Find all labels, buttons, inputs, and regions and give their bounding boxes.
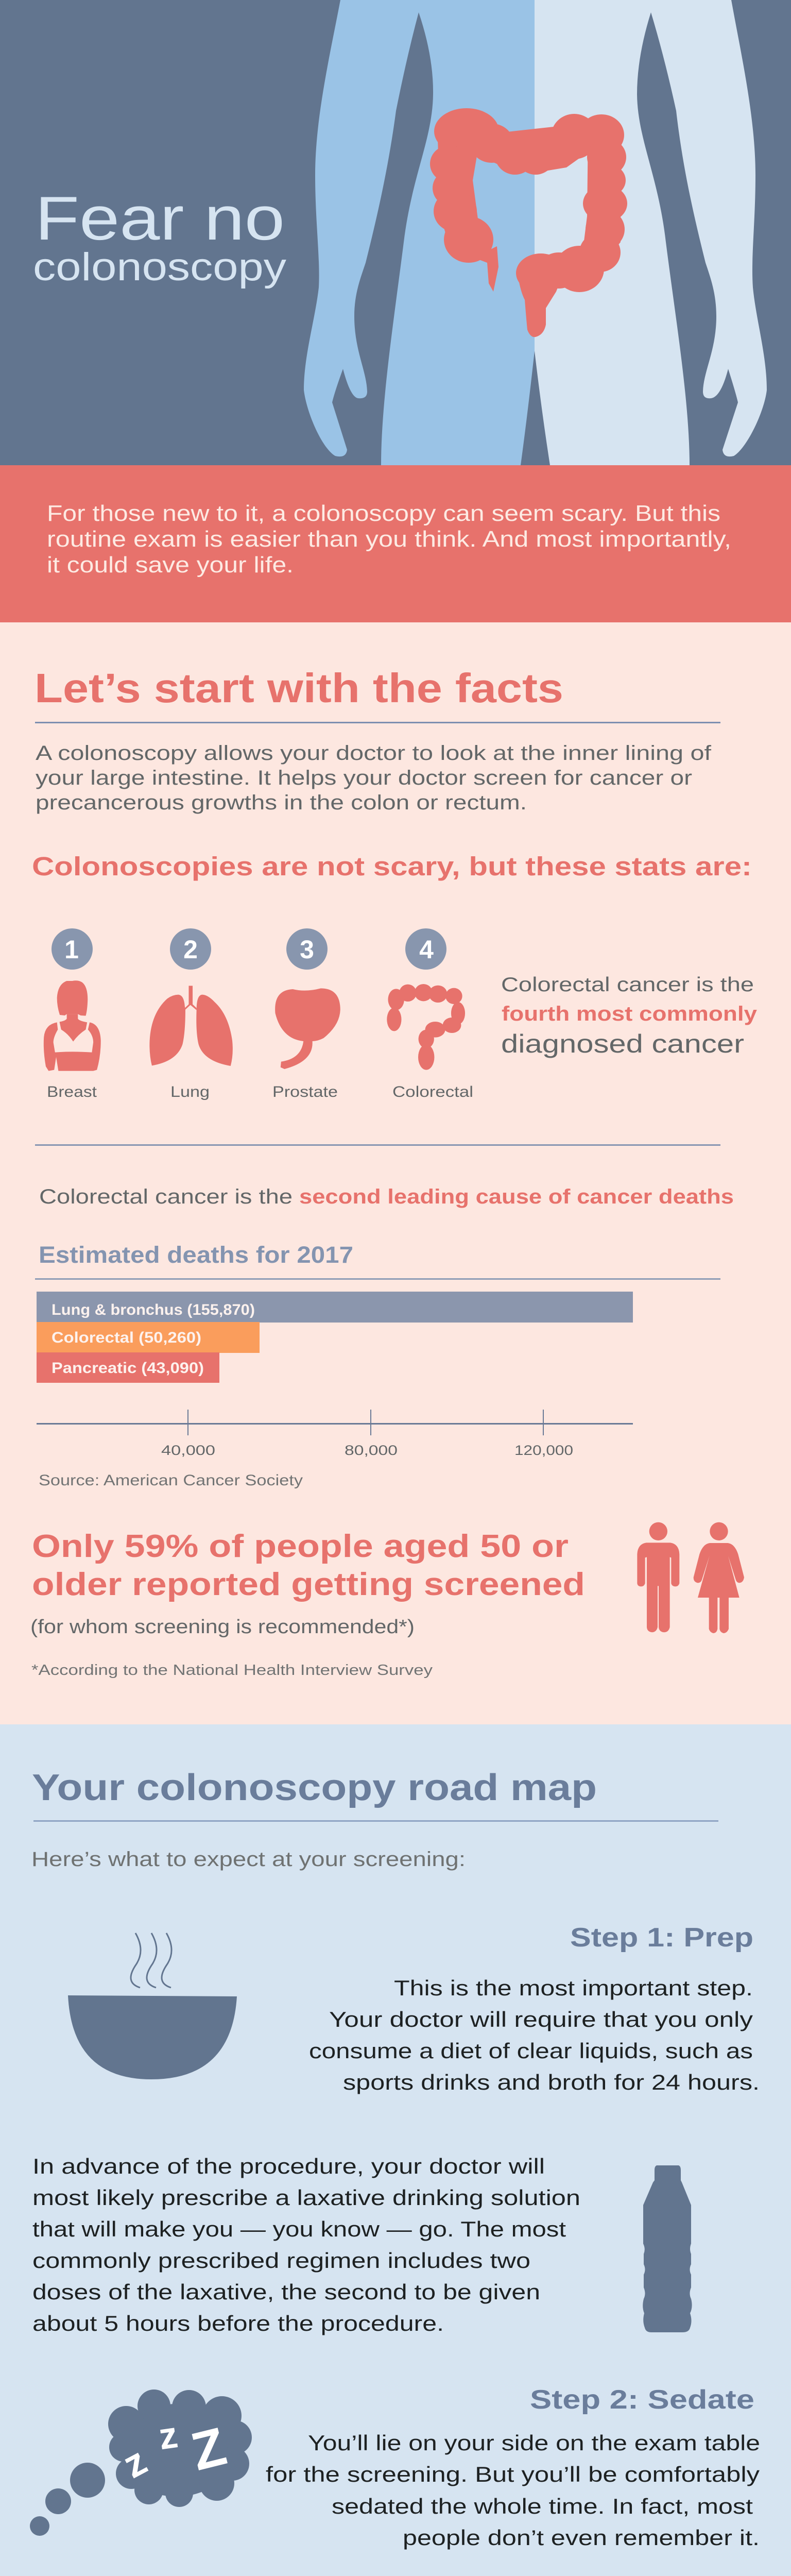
facts paragraph: precancerous growths in the colon or rectum. — [36, 791, 527, 814]
icon: sleep cloud — [30, 2389, 252, 2536]
source: Source: American Cancer Society — [39, 1472, 303, 1489]
icon: sleep cloud: z — [116, 2439, 154, 2487]
laxative text: that will make you — you know — go. The most — [32, 2217, 566, 2241]
intro text: routine exam is easier than you think. And most importantly, — [47, 527, 731, 552]
laxative text — [32, 2154, 580, 2335]
axis — [37, 1410, 633, 1458]
step 1: prep — [32, 1923, 760, 2335]
step 1 heading: Step 1: Prep — [570, 1923, 753, 1953]
bar: pancreatic: Pancreatic (43,090) — [51, 1360, 204, 1377]
panel: facts — [30, 665, 758, 1679]
stat: 59 percent: (for whom screening is recommended*) — [30, 1616, 415, 1638]
step 2 text: for the screening. But you’ll be comfortably — [266, 2462, 760, 2486]
number badges: 3 — [300, 935, 314, 964]
axis: 40,000 — [161, 1443, 215, 1458]
callout: fourth most common: Colorectal cancer is the — [501, 974, 754, 996]
icon: bottle — [643, 2165, 692, 2332]
icon: man and woman — [637, 1522, 744, 1633]
bar: pancreatic — [37, 1352, 219, 1383]
icon: bowl — [68, 1933, 237, 2079]
heading: road map: Your colonoscopy road map — [32, 1767, 597, 1808]
number badges: 4 — [419, 935, 434, 964]
stat: 59 percent: older reported getting screened — [32, 1567, 585, 1602]
step 2 text — [266, 2431, 760, 2550]
laxative text: doses of the laxative, the second to be given — [32, 2280, 540, 2304]
axis: 120,000 — [514, 1443, 573, 1458]
laxative text: about 5 hours before the procedure. — [32, 2311, 444, 2335]
laxative text: commonly prescribed regimen includes two — [32, 2248, 530, 2273]
step 2 text: sedated the whole time. In fact, most — [332, 2494, 753, 2518]
intro text — [47, 501, 731, 578]
facts paragraph: A colonoscopy allows your doctor to look at the inner lining of — [36, 742, 712, 765]
callout: second leading cause — [39, 1185, 734, 1208]
icon: breast — [44, 980, 101, 1071]
number badges: 2 — [183, 935, 198, 964]
stat: 59 percent: Only 59% of people aged 50 or — [32, 1529, 569, 1564]
number badges: 1 — [64, 935, 79, 964]
facts paragraph: your large intestine. It helps your doctor screen for cancer or — [36, 767, 692, 789]
intro text: For those new to it, a colonoscopy can seem scary. But this — [47, 501, 720, 526]
cancer labels: Colorectal — [392, 1083, 473, 1100]
icon: prostate — [275, 988, 340, 1069]
facts paragraph — [36, 742, 712, 814]
step 2 text: people don’t even remember it. — [403, 2526, 760, 2550]
bar chart — [37, 1292, 633, 1458]
body silhouette left half — [304, 0, 535, 465]
panel: hero — [0, 0, 791, 466]
step 2 text: You’ll lie on your side on the exam table — [308, 2431, 760, 2455]
number badges — [51, 928, 446, 970]
step 1 text: Your doctor will require that you only — [329, 2007, 753, 2031]
intro text: it could save your life. — [47, 552, 294, 578]
icon: colorectal — [387, 984, 465, 1070]
panel: hero and intro — [0, 0, 791, 622]
title: colonoscopy — [33, 245, 286, 289]
cancer labels: Breast — [47, 1083, 97, 1100]
panel: road map — [0, 1724, 791, 2576]
body silhouette right half — [535, 0, 767, 465]
callout: fourth most common: fourth most commonly — [502, 1003, 758, 1025]
bar: colorectal — [37, 1322, 260, 1353]
title: Fear no — [35, 184, 285, 253]
road map intro: Here’s what to expect at your screening: — [31, 1848, 466, 1871]
icon: sleep cloud: Z — [186, 2416, 232, 2482]
callout: fourth most common — [501, 974, 758, 1058]
axis: 80,000 — [345, 1443, 398, 1458]
step 1 text: This is the most important step. — [394, 1976, 753, 2000]
laxative text: most likely prescribe a laxative drinking solution — [32, 2185, 580, 2210]
callout: second leading cause: Colorectal cancer is the — [39, 1185, 293, 1208]
icon: lung — [149, 986, 233, 1066]
stat: 59 percent — [30, 1529, 585, 1638]
chart heading: Estimated deaths for 2017 — [39, 1242, 353, 1268]
footnote: *According to the National Health Interview Survey — [31, 1662, 433, 1679]
title — [33, 184, 286, 289]
bar: lung and bronchus: Lung & bronchus (155,870) — [51, 1301, 255, 1318]
panel: intro band — [0, 465, 791, 622]
cancer labels: Lung — [170, 1083, 210, 1100]
step 1 text: sports drinks and broth for 24 hours. — [343, 2070, 760, 2094]
cancer labels: Prostate — [272, 1083, 338, 1100]
step 2: sedate — [30, 2385, 760, 2550]
icon: sleep cloud: z — [156, 2414, 180, 2458]
step 2 heading: Step 2: Sedate — [530, 2385, 754, 2415]
callout: fourth most common: diagnosed cancer — [501, 1029, 744, 1058]
subheading: stats: Colonoscopies are not scary, but these stats are: — [32, 852, 752, 881]
bar: lung and bronchus — [37, 1292, 633, 1323]
laxative text: In advance of the procedure, your doctor will — [32, 2154, 545, 2178]
icon: colon — [430, 108, 627, 337]
callout: second leading cause: second leading cause of cancer deaths — [299, 1185, 734, 1208]
cancer labels — [47, 1083, 473, 1100]
step 1 text: consume a diet of clear liquids, such as — [309, 2039, 753, 2063]
bar: colorectal: Colorectal (50,260) — [51, 1329, 201, 1346]
heading: facts: Let’s start with the facts — [35, 665, 563, 711]
step 1 text — [309, 1976, 760, 2094]
